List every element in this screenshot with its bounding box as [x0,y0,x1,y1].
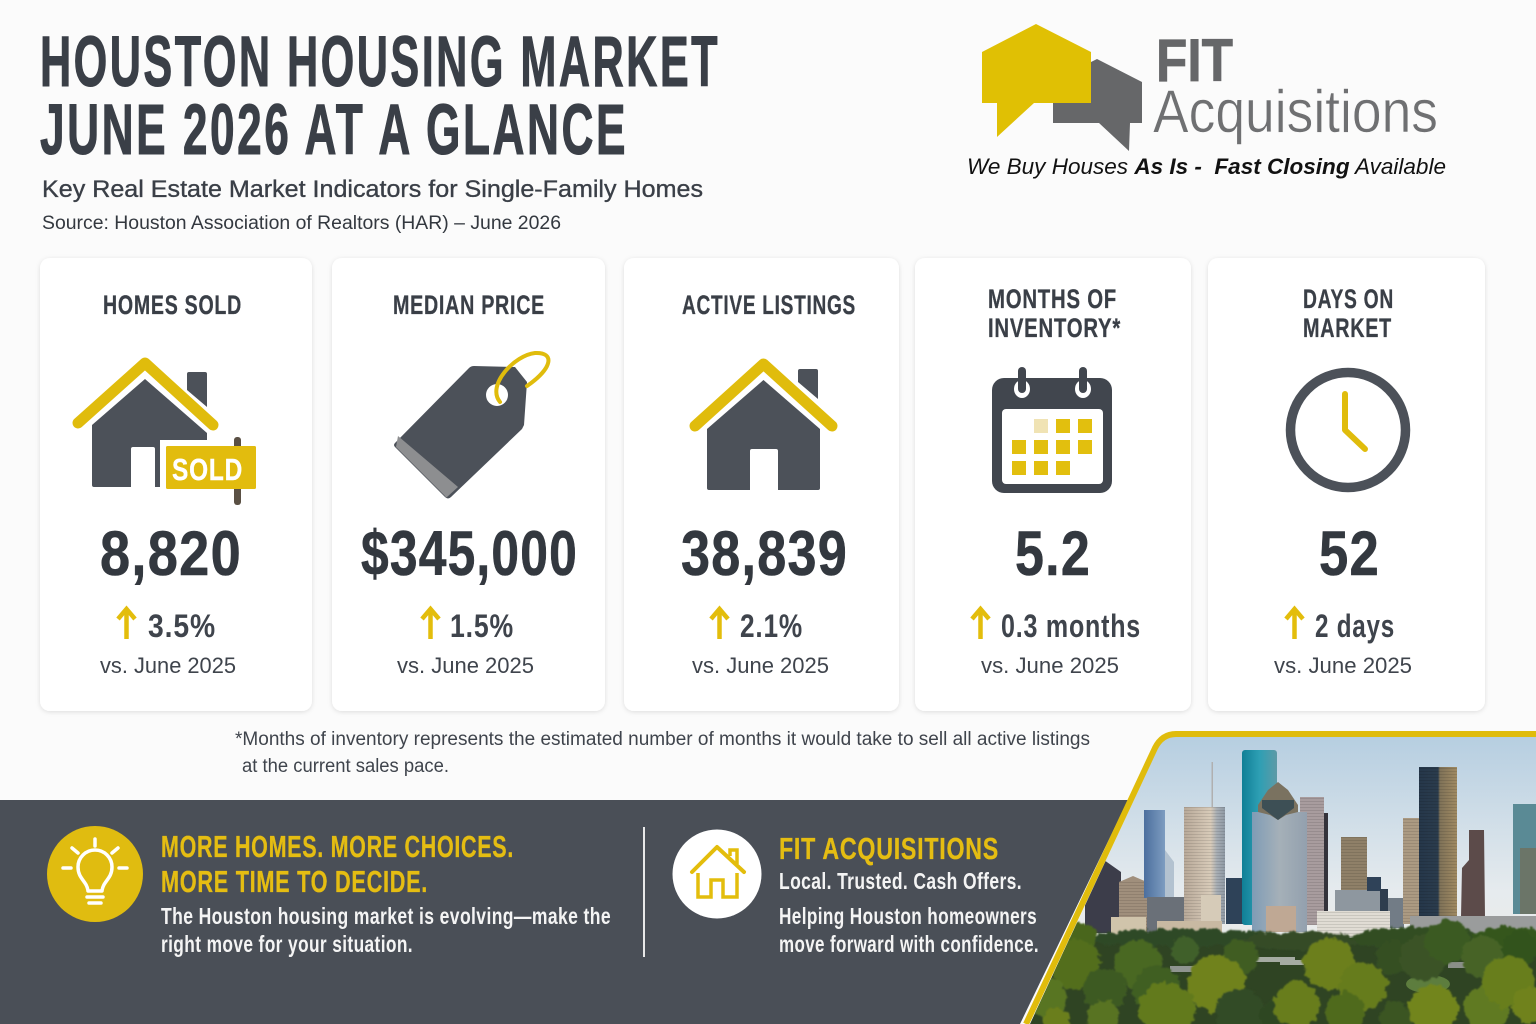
yellow photo frame [1026,734,1536,1024]
change: median price: 1.5% [450,608,514,644]
arrow up [972,609,989,639]
icon: price tag [394,353,548,498]
change: days on market: 2 days [1315,608,1395,644]
icon: house with sold sign: SOLD [172,452,243,487]
title line 2: JUNE 2026 AT A GLANCE [40,91,628,170]
heading: median price: MEDIAN PRICE [393,290,545,320]
footnote: at the current sales pace. [242,756,449,777]
arrow up [422,609,439,639]
change: homes sold: 3.5% [148,608,216,644]
logo: FIT Acquisitions [967,24,1446,179]
comparison label: vs. June 2025 [981,653,1119,678]
arrow up [1286,609,1303,639]
footnote [235,729,1090,777]
panel: median price [332,258,605,711]
comparison label: vs. June 2025 [397,653,534,678]
icon: lightbulb badge [47,826,143,922]
icon: house with sold sign [78,363,256,505]
callout text: FIT Acquisitions: Helping Houston homeowners [779,903,1037,929]
value: months of inventory: 5.2 [1015,519,1091,589]
comparison label: vs. June 2025 [692,653,829,678]
icon: clock [1290,372,1406,488]
callout text: FIT Acquisitions [779,868,1039,957]
callout heading: more homes: MORE TIME TO DECIDE. [161,864,428,899]
callout text: more homes: right move for your situation. [161,931,413,957]
bottom dark banner [0,800,1128,1024]
callout text: FIT Acquisitions: Local. Trusted. Cash Offers. [779,868,1022,894]
logo tagline: We Buy Houses As Is - Fast Closing Available [967,154,1446,179]
logo wordmark Acquisitions: Acquisitions [1153,78,1438,145]
callout text: more homes: The Houston housing market is evolving—make the [161,903,611,929]
heading: active listings: ACTIVE LISTINGS [682,290,856,320]
icon: house [695,364,832,490]
value: median price: $345,000 [361,519,578,589]
icon: calendar [992,367,1112,493]
title line 1: HOUSTON HOUSING MARKET [40,23,720,102]
photo: Houston skyline [1020,730,1536,1024]
heading: homes sold: HOMES SOLD [103,290,242,320]
change: active listings: 2.1% [740,608,803,644]
callout text: FIT Acquisitions: move forward with confidence. [779,931,1039,957]
skyline buildings [1085,750,1536,937]
value: days on market: 52 [1319,519,1380,589]
heading: months of inventory: INVENTORY* [988,313,1121,343]
panel: months of inventory [915,258,1191,711]
panel: active listings [624,258,899,711]
heading: days on market [1303,284,1394,343]
icon: house badge [672,830,762,918]
subtitle: Key Real Estate Market Indicators for Single-Family Homes [42,176,703,203]
header: title block [40,23,720,234]
source line: Source: Houston Association of Realtors (HAR) – June 2026 [42,213,561,234]
callout heading: FIT Acquisitions: FIT ACQUISITIONS [779,831,999,866]
callout heading: more homes: MORE HOMES. MORE CHOICES. [161,829,514,864]
arrow up [118,609,135,639]
footnote: *Months of inventory represents the estimated number of months it would take to sell all active listings [235,729,1090,750]
panel: homes sold [40,258,312,711]
tree canopy [1020,919,1536,1024]
logo icon: speech-bubble houses [982,24,1142,151]
panel: days on market [1208,258,1485,711]
value: homes sold: 8,820 [100,519,242,589]
heading: months of inventory: MONTHS OF [988,284,1117,314]
comparison label: vs. June 2025 [100,653,236,678]
callout heading: more homes [161,829,514,899]
arrow up [711,609,728,639]
heading: days on market: DAYS ON [1303,284,1394,314]
value: active listings: 38,839 [681,519,848,589]
logo wordmark FIT: FIT [1156,27,1233,94]
change: months of inventory: 0.3 months [1001,608,1141,644]
heading: days on market: MARKET [1303,313,1392,343]
heading: months of inventory [988,284,1121,343]
callout text: more homes [161,903,611,957]
comparison label: vs. June 2025 [1274,653,1412,678]
